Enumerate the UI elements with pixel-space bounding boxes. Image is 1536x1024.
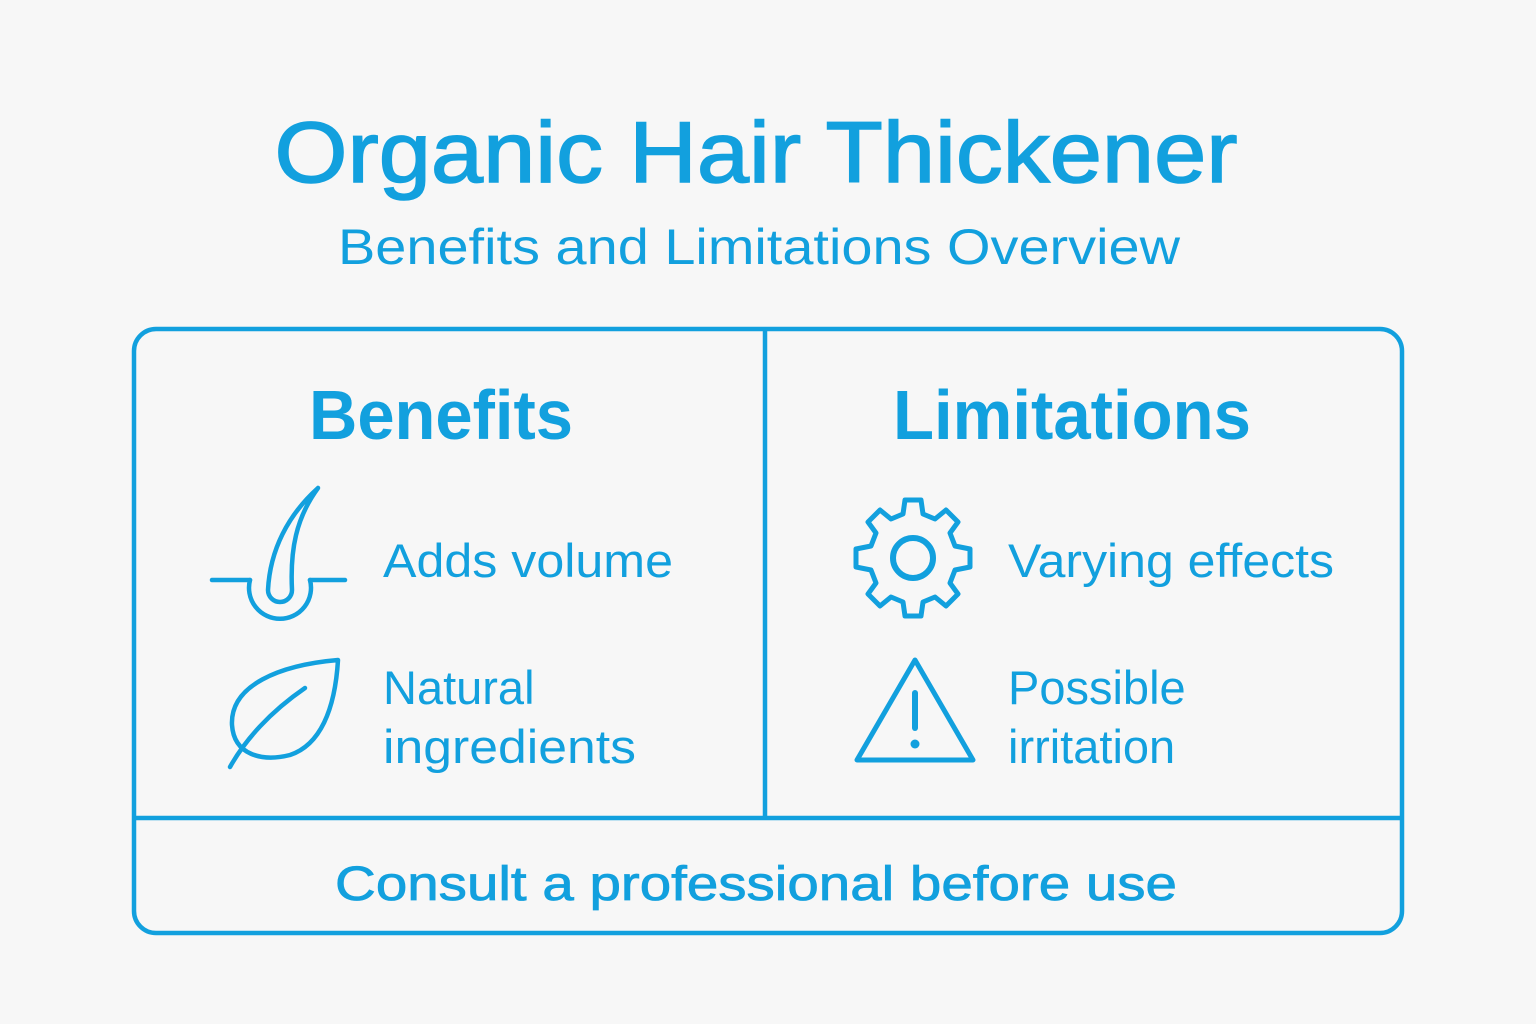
text: varying effects: Varying effects [1008, 534, 1334, 587]
icon: leaf [230, 660, 338, 767]
text: natural ingredients: Natural [383, 661, 535, 714]
icon: hair follicle [212, 488, 345, 619]
icon: warning [857, 660, 973, 760]
text: adds volume: Adds volume [383, 534, 673, 587]
heading: benefits: Benefits [309, 376, 573, 454]
panel: main frame [134, 329, 1402, 933]
title: Organic Hair Thickener [274, 105, 1238, 201]
text: possible irritation: Possible [1008, 661, 1186, 714]
panel: limitations [856, 376, 1334, 773]
subtitle: Benefits and Limitations Overview [338, 219, 1181, 275]
heading: limitations: Limitations [893, 376, 1251, 454]
panel: benefits [212, 376, 673, 773]
panel: benefits: ingredients [383, 720, 636, 773]
footer note: Consult a professional before use [335, 858, 1177, 911]
panel: limitations: irritation [1008, 720, 1175, 773]
icon: gear [856, 500, 970, 616]
